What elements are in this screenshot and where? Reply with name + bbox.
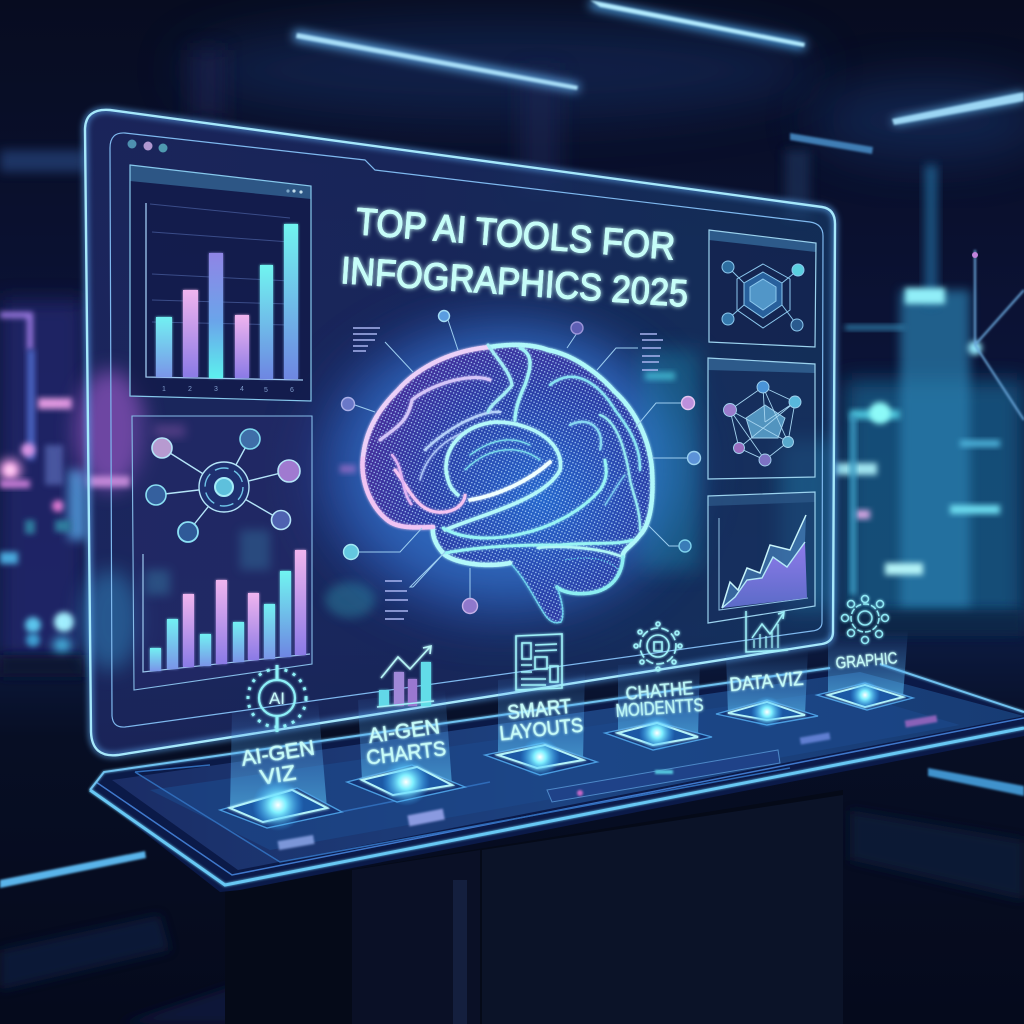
tool: Graphic <box>817 596 913 710</box>
brain gyri right <box>488 345 512 412</box>
panel: top bar chart: 3 <box>214 386 218 393</box>
panel: top bar chart <box>130 165 311 401</box>
tool: Smart Layouts: SMART <box>506 696 572 724</box>
desk pedestal <box>225 790 843 1024</box>
bars <box>156 224 298 379</box>
tool: Data Viz <box>716 611 818 728</box>
nodes <box>342 310 700 614</box>
panel: hexagon diagram <box>709 230 816 347</box>
panel: top bar chart: 5 <box>264 387 268 394</box>
tool: AI-Gen Charts: CHARTS <box>365 737 447 770</box>
tool: Data Viz: DATA VIZ <box>729 669 805 696</box>
brain <box>350 335 670 623</box>
panel: area chart <box>708 492 815 623</box>
panel: radar network <box>708 358 815 479</box>
tool: Graphic: GRAPHIC <box>835 648 898 673</box>
icon: AI chip: AI <box>269 689 285 708</box>
panel: top bar chart: 1 <box>162 386 166 393</box>
brain outline <box>362 345 652 623</box>
title: TOP AI TOOLS FOR <box>354 201 677 269</box>
mini lists <box>353 328 663 619</box>
brain temporal core <box>445 422 561 530</box>
panel: top bar chart: 4 <box>240 386 244 393</box>
bars <box>150 550 306 671</box>
tool: AI-Gen Viz <box>220 665 342 831</box>
icon: gear ring <box>634 622 682 671</box>
title: INFOGRAPHICS 2025 <box>339 250 689 316</box>
desk strip <box>547 750 780 802</box>
floor and side lights <box>0 768 1024 1024</box>
blurred city right <box>835 165 1024 636</box>
window dots <box>128 140 168 152</box>
tool: AI-Gen Viz: AI-GEN <box>240 736 316 771</box>
icon: line chart <box>746 611 788 652</box>
icon: network gear <box>842 596 888 644</box>
callout lines <box>349 320 690 600</box>
holographic screen <box>75 110 835 755</box>
tool: Smart Layouts: LAYOUTS <box>498 715 584 745</box>
brain gyri pink <box>395 470 465 512</box>
icon: rising bars <box>377 646 434 707</box>
tool: AI-Gen Viz: VIZ <box>258 761 298 790</box>
network diagram <box>146 429 300 542</box>
tool: AI-Gen Charts: AI-GEN <box>367 715 441 748</box>
panel: top bar chart: 6 <box>290 387 294 394</box>
tool: Chathe Moidentts: CHATHE <box>625 678 694 704</box>
screen glows <box>75 320 835 670</box>
tool: AI-Gen Charts <box>347 646 465 806</box>
panel: network and bars <box>132 416 312 690</box>
desk top <box>90 664 1024 892</box>
blurred city left <box>0 300 86 677</box>
brain callouts <box>342 310 700 619</box>
title <box>339 201 689 316</box>
tool: Smart Layouts <box>485 634 597 777</box>
panel: top bar chart: 2 <box>188 386 192 393</box>
ceiling lights <box>293 0 1024 154</box>
tool: Chathe Moidentts <box>605 622 712 751</box>
brain stem shade <box>565 558 618 570</box>
icon: AI chip <box>248 665 306 732</box>
tool: Chathe Moidentts: MOIDENTTS <box>615 695 704 721</box>
icon: page layout <box>516 634 562 690</box>
